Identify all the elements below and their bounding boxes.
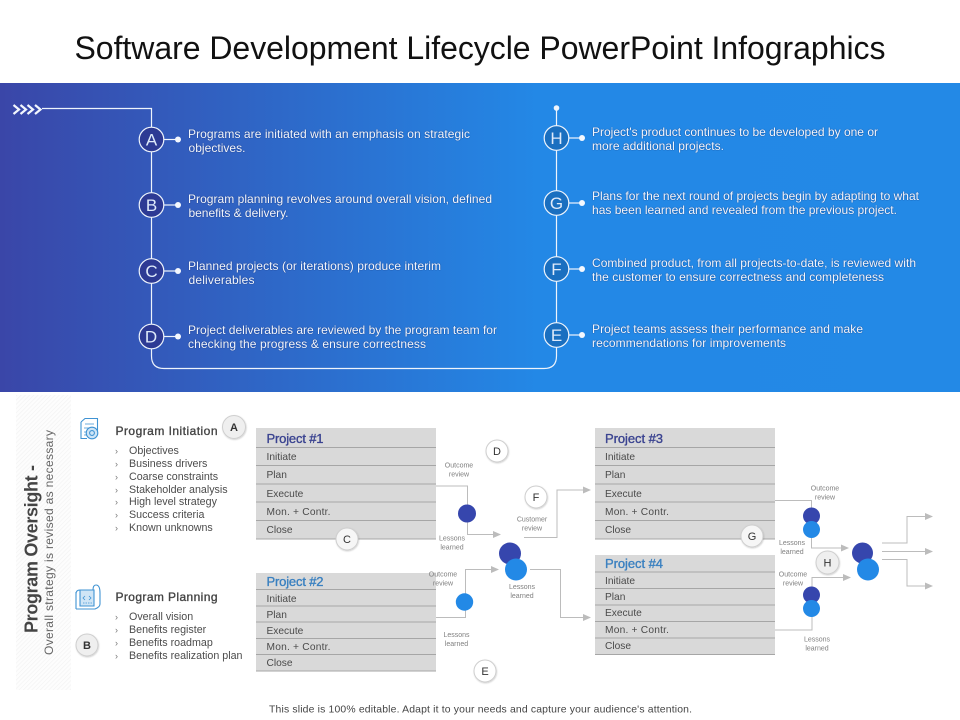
flow labels: learned	[445, 641, 468, 648]
table: project 3: Plan	[605, 470, 625, 481]
table: project 3	[595, 428, 775, 539]
text block: program initiation: Coarse constraints	[129, 471, 218, 483]
badge E	[474, 660, 496, 682]
step E: recommendations for improvements	[592, 336, 786, 350]
table: project 1: Mon. + Contr.	[266, 507, 330, 518]
step C	[139, 259, 441, 287]
table: project 2	[256, 573, 436, 671]
step H	[544, 125, 878, 153]
table: project 3: Close	[605, 525, 631, 536]
table: project 3: Project #3	[605, 431, 663, 446]
flow labels: review	[433, 580, 454, 588]
step D: checking the progress & ensure correctness	[188, 337, 426, 351]
title: Software Development Lifecycle PowerPoint Infographics	[74, 30, 886, 66]
table: project 2: Project #2	[266, 574, 324, 589]
table: project 4: Plan	[605, 592, 625, 603]
steps left column	[139, 127, 497, 351]
flow labels: Lessons	[509, 584, 536, 591]
badge D	[486, 440, 508, 462]
badge H	[816, 551, 839, 574]
flow labels: review	[815, 494, 836, 502]
flow labels: Lessons	[439, 536, 466, 542]
table: project 2: Mon. + Contr.	[266, 642, 330, 653]
text block: program planning: ›	[115, 612, 118, 622]
table: project 1: Execute	[266, 489, 304, 500]
text block: program initiation: ›	[115, 446, 118, 456]
step B	[139, 192, 492, 220]
flow labels: learned	[440, 544, 464, 552]
text block: program initiation: Objectives	[129, 445, 179, 457]
flow nodes	[456, 504, 879, 617]
table: project 1: Project #1	[266, 431, 324, 446]
step B: Program planning revolves around overall vision, defined	[188, 192, 492, 206]
step A: Programs are initiated with an emphasis on strategic	[188, 127, 470, 141]
step B: B	[146, 196, 157, 215]
badge E: E	[481, 666, 489, 678]
text block: program initiation	[115, 424, 228, 534]
table: project 4: Project #4	[605, 556, 663, 571]
letter badges	[76, 416, 839, 682]
step C: C	[145, 262, 158, 281]
text block: program planning: Benefits roadmap	[129, 637, 213, 649]
text block: program planning: ›	[115, 625, 118, 635]
table: project 4: Execute	[605, 608, 642, 619]
text block: program planning: Program Planning	[116, 590, 218, 604]
table: project 4	[595, 555, 775, 655]
timeline end dot	[554, 105, 559, 111]
table: project 2: Execute	[266, 626, 304, 637]
badge A: A	[230, 422, 238, 434]
table: project 1: Initiate	[266, 452, 297, 463]
badge F: F	[533, 492, 540, 504]
step F: Combined product, from all projects-to-date, is reviewed with	[592, 256, 916, 270]
table: project 1: Close	[266, 525, 293, 536]
table: project 4: Initiate	[605, 576, 635, 587]
step D: D	[145, 328, 157, 346]
text block: program initiation: ›	[115, 523, 118, 533]
table: project 3: Mon. + Contr.	[605, 507, 669, 518]
flow labels: Outcome	[445, 462, 473, 470]
steps right column	[544, 125, 920, 350]
text block: program planning: ›	[115, 638, 118, 648]
text block: program initiation: Program Initiation	[116, 424, 218, 438]
step A: A	[146, 130, 158, 150]
step C: Planned projects (or iterations) produce interim	[188, 259, 441, 273]
flow labels: Lessons	[443, 632, 470, 639]
badge G: G	[748, 531, 756, 543]
panel: program oversight sidebar: Program Oversight -	[22, 465, 42, 633]
step A: objectives.	[188, 141, 246, 155]
text block: program initiation: Known unknowns	[129, 522, 213, 534]
badge C: C	[343, 534, 351, 546]
text block: program initiation: ›	[115, 497, 118, 507]
text block: program planning: ›	[115, 651, 118, 661]
step H: H	[550, 129, 563, 148]
icon: blueprint scroll	[76, 585, 100, 609]
step G	[544, 189, 920, 217]
icon: document with gear	[81, 418, 98, 439]
icon: chevrons start arrow	[14, 105, 40, 114]
step F: the customer to ensure correctness and completeness	[592, 270, 884, 284]
step H: more additional projects.	[592, 139, 724, 153]
table: project 4: Mon. + Contr.	[605, 625, 669, 636]
flow labels: learned	[780, 549, 804, 556]
flow labels: Lessons	[779, 540, 806, 547]
flow connectors: projects 3 and 4 to outputs	[775, 500, 933, 630]
text block: program planning: Benefits register	[129, 624, 207, 636]
flow labels: review	[783, 580, 804, 588]
text block: program planning: Benefits realization plan	[129, 650, 243, 662]
badge A	[222, 416, 246, 438]
text block: program planning: Overall vision	[129, 611, 193, 623]
table: project 2: Close	[266, 658, 293, 669]
table: project 2: Initiate	[266, 594, 297, 605]
badge H: H	[824, 558, 832, 570]
badge D: D	[493, 446, 501, 458]
flow labels: review	[449, 472, 470, 478]
step E: Project teams assess their performance and make	[592, 322, 863, 336]
text block: program initiation: High level strategy	[129, 496, 218, 508]
table: project 2: Plan	[266, 610, 287, 621]
step B: benefits & delivery.	[188, 206, 288, 220]
step G: has been learned and revealed from the previous project.	[592, 203, 897, 217]
table: project 3: Initiate	[605, 452, 635, 463]
flow labels: Customer	[517, 516, 548, 524]
panel: program oversight sidebar	[16, 395, 71, 690]
step E: E	[551, 326, 562, 345]
flow labels: Outcome	[429, 572, 457, 578]
badge G	[741, 525, 763, 547]
text block: program initiation: Success criteria	[129, 509, 204, 521]
step F: F	[551, 260, 562, 279]
step F	[544, 256, 916, 284]
step G: G	[550, 194, 563, 213]
table: project 3: Execute	[605, 489, 642, 500]
step C: deliverables	[188, 273, 254, 287]
timeline connector	[42, 108, 556, 368]
flow labels: Outcome	[811, 486, 839, 492]
table: project 1: Plan	[266, 470, 287, 481]
panel: lifecycle banner	[0, 83, 960, 392]
text block: program planning	[115, 590, 243, 662]
text block: program initiation: ›	[115, 472, 118, 482]
step H: Project's product continues to be developed by one or	[592, 125, 878, 139]
step D: Project deliverables are reviewed by the program team for	[188, 323, 497, 337]
flow labels: learned	[805, 646, 829, 652]
badge B	[76, 634, 98, 656]
badge C	[336, 528, 358, 550]
text block: program initiation: Business drivers	[129, 458, 207, 470]
text block: program initiation: Stakeholder analysis	[129, 484, 228, 496]
text block: program initiation: ›	[115, 510, 118, 520]
flow labels: learned	[510, 593, 534, 600]
flow labels: Lessons	[804, 636, 831, 644]
step E	[544, 322, 863, 350]
text block: program initiation: ›	[115, 459, 118, 469]
flow labels: review	[522, 526, 543, 532]
step G: Plans for the next round of projects begin by adapting to what	[592, 189, 920, 203]
flow connectors: projects 1 and 2 to centre	[436, 486, 591, 621]
table: project 4: Close	[605, 641, 631, 652]
badge F	[525, 486, 547, 508]
footer note: This slide is 100% editable. Adapt it to your needs and capture your audience's attention.	[269, 704, 692, 716]
table: project 1	[256, 428, 436, 539]
badge B: B	[83, 640, 91, 652]
text block: program initiation: ›	[115, 485, 118, 495]
flow labels	[429, 462, 839, 652]
step D	[139, 323, 497, 351]
panel: program oversight sidebar: Overall strategy is revised as necessary	[42, 430, 56, 655]
flow labels: Outcome	[779, 572, 807, 578]
step A	[139, 127, 470, 155]
